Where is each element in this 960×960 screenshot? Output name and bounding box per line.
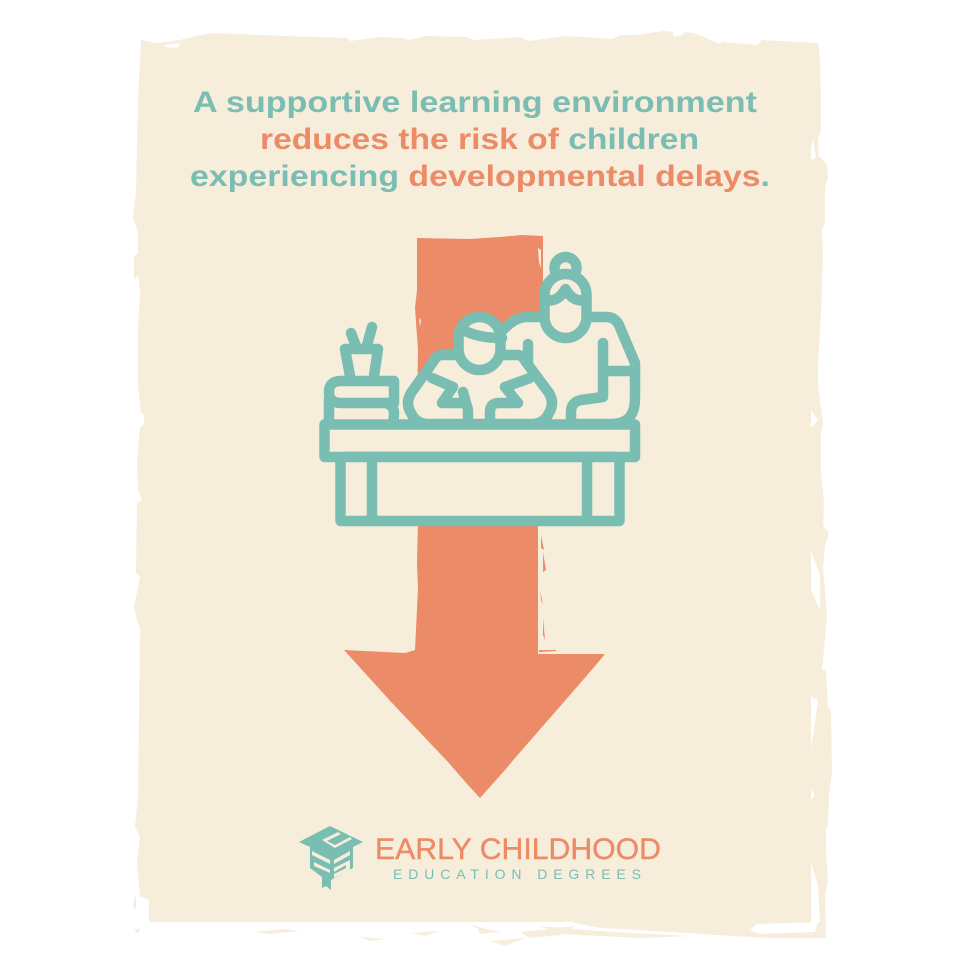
logo: graduation cap book <box>299 826 363 890</box>
panel: rough paper background <box>133 31 832 946</box>
title: A supportive learning environment <box>193 86 757 119</box>
decorative white tears in paper <box>164 43 820 934</box>
title: experiencing developmental delays . <box>190 160 770 193</box>
books and plant <box>329 327 394 424</box>
decorative slits in arrow <box>419 248 541 327</box>
logo wordmark <box>375 833 661 882</box>
teacher <box>503 257 635 424</box>
desk <box>324 424 635 521</box>
logo wordmark: EDUCATION DEGREES <box>393 866 641 882</box>
title <box>190 86 770 193</box>
child <box>408 317 552 424</box>
logo wordmark: EARLY CHILDHOOD <box>375 833 661 866</box>
icon: teacher and child at desk <box>324 257 635 521</box>
title: reduces the risk of children <box>260 123 699 156</box>
arrow: downward <box>344 235 605 798</box>
